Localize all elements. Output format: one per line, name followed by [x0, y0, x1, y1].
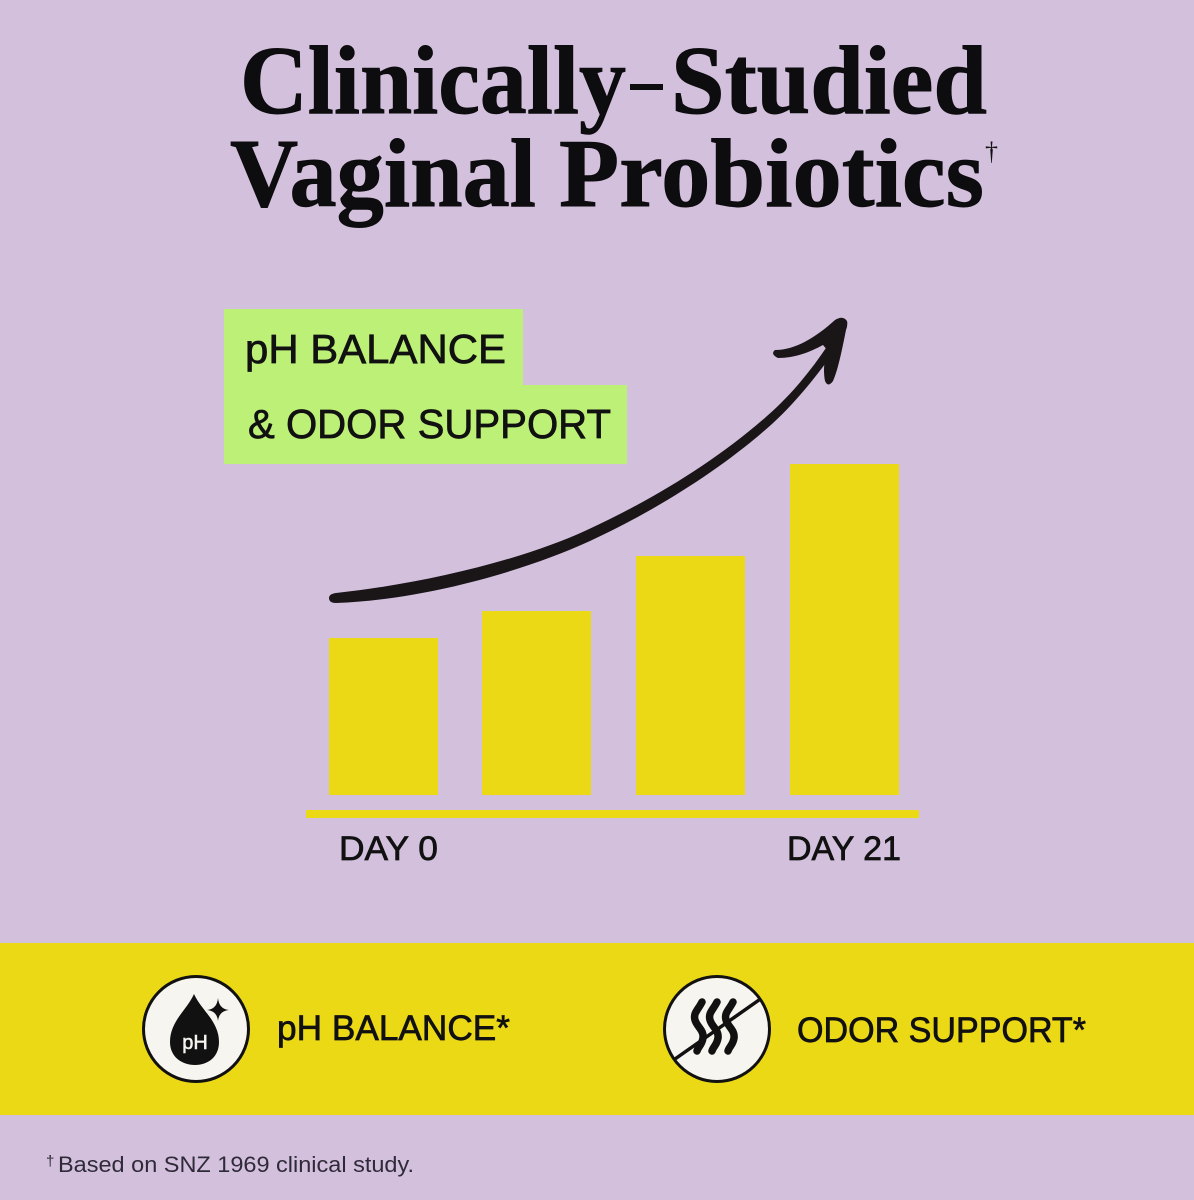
title: Studied	[671, 27, 987, 135]
callout: pH balance and odor support: & ODOR SUPPORT	[248, 401, 611, 447]
title: †	[985, 137, 998, 166]
bar chart: DAY 0	[339, 830, 438, 868]
icon: pH drop	[144, 976, 248, 1082]
yellow benefits band	[0, 943, 1194, 1115]
title: Clinically	[240, 27, 626, 135]
icon: pH drop: pH	[182, 1032, 208, 1054]
arrow: upward trend	[329, 318, 847, 603]
label: odor support: ODOR SUPPORT*	[797, 1011, 1086, 1050]
callout: pH balance and odor support	[224, 309, 627, 464]
title: Probiotics	[559, 120, 984, 228]
footnote: †	[46, 1153, 54, 1170]
bar chart: DAY 21	[787, 830, 901, 868]
icon: no odor	[664, 976, 770, 1082]
label: pH balance: pH BALANCE*	[277, 1009, 510, 1048]
title	[230, 27, 998, 228]
bar chart	[306, 464, 919, 868]
callout: pH balance and odor support: pH BALANCE	[245, 326, 506, 372]
title: Vaginal	[230, 120, 536, 228]
footnote: Based on SNZ 1969 clinical study.	[58, 1152, 414, 1177]
